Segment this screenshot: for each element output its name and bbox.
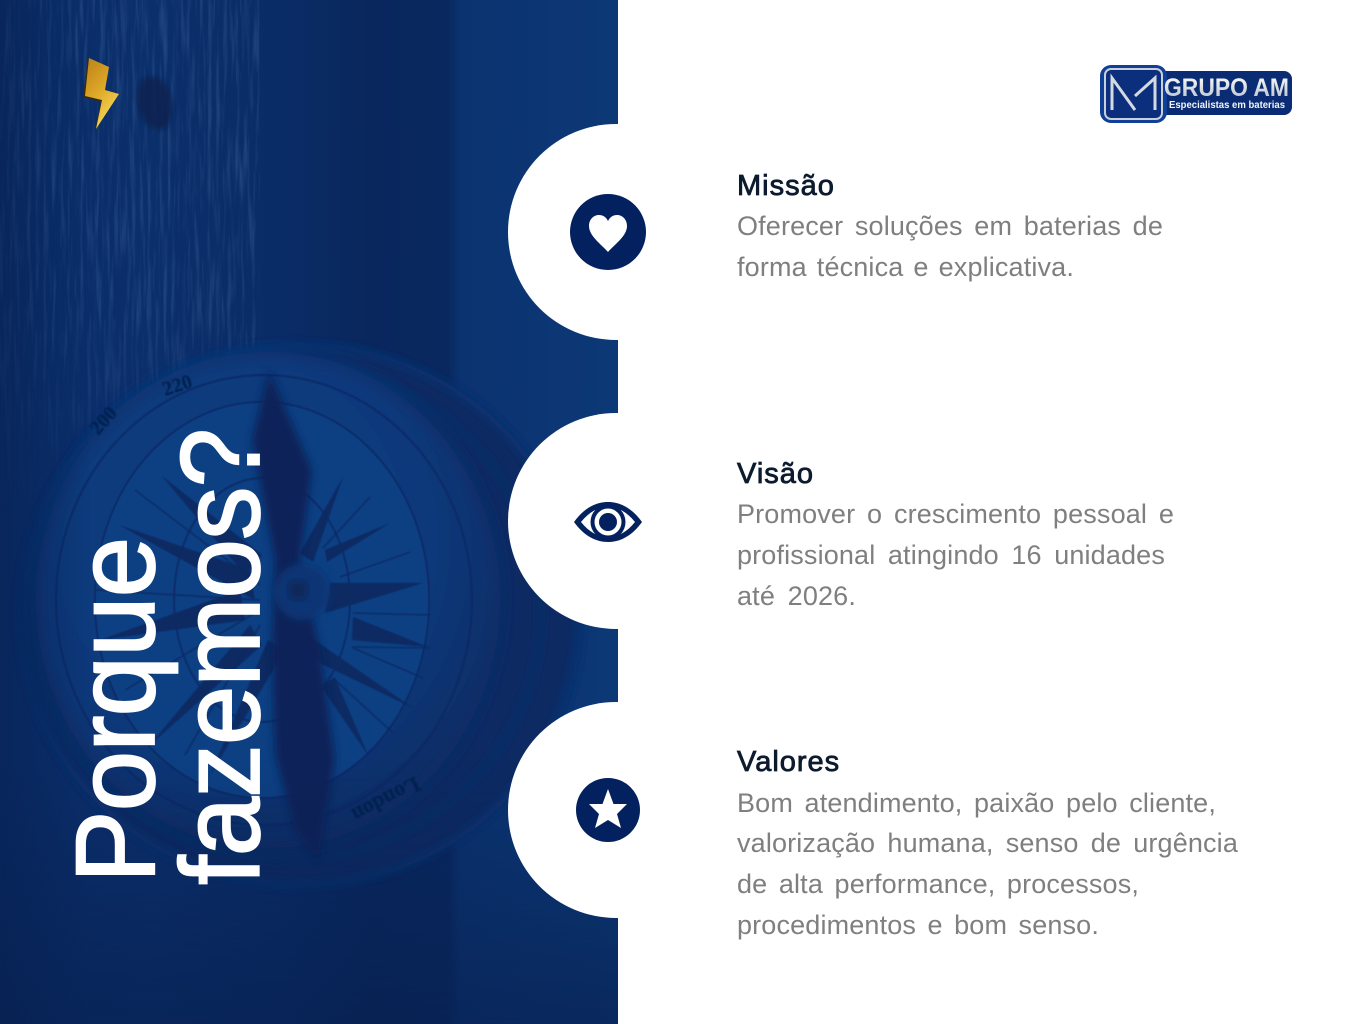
text block: valores	[736, 746, 1238, 940]
logo: Grupo AM	[1100, 65, 1292, 123]
compass dial markings	[85, 371, 424, 828]
text block: missão	[737, 170, 1163, 282]
heading: missão: Missão	[737, 170, 835, 202]
compass dial markings: 200	[85, 402, 122, 439]
logo: Grupo AM: GRUPO AM	[1164, 74, 1289, 102]
text: valores line 4: procedimentos e bom senso.	[737, 910, 1099, 940]
compass needle	[252, 371, 335, 862]
circle tab: visão	[508, 413, 724, 629]
panel: blue compass photo background	[0, 0, 618, 1024]
circle tab: valores	[508, 702, 724, 918]
title: Porque fazemos?	[53, 429, 282, 885]
compass dial markings: London	[348, 772, 424, 828]
text: valores line 1: Bom atendimento, paixão pelo cliente,	[737, 788, 1216, 818]
text: missão line 1: Oferecer soluções em baterias de	[737, 211, 1163, 241]
compass dial markings: 220	[160, 371, 195, 401]
text: visão line 1: Promover o crescimento pessoal e	[737, 499, 1174, 529]
logo: Grupo AM: Especialistas em baterias	[1169, 99, 1285, 111]
text: valores line 3: de alta performance, processos,	[737, 869, 1139, 899]
icon: gold lightning bolt	[83, 58, 174, 130]
text: visão line 2: profissional atingindo 16 unidades	[737, 540, 1165, 570]
icon: eye	[574, 502, 642, 542]
text: visão line 3: até 2026.	[737, 581, 856, 611]
compass illustration	[18, 343, 582, 887]
heading: visão: Visão	[737, 458, 814, 490]
title: Porque fazemos?: Porque	[53, 538, 178, 883]
compass rose points	[100, 476, 428, 775]
icon: star	[576, 778, 640, 842]
title: Porque fazemos?: fazemos?	[158, 429, 282, 885]
text: valores line 2: valorização humana, senso de urgência	[737, 828, 1238, 858]
text block: visão	[736, 458, 1174, 611]
heading: valores: Valores	[737, 746, 840, 778]
text: missão line 2: forma técnica e explicativa.	[737, 252, 1074, 282]
icon: heart	[570, 194, 646, 270]
circle tab: missão	[508, 124, 724, 340]
